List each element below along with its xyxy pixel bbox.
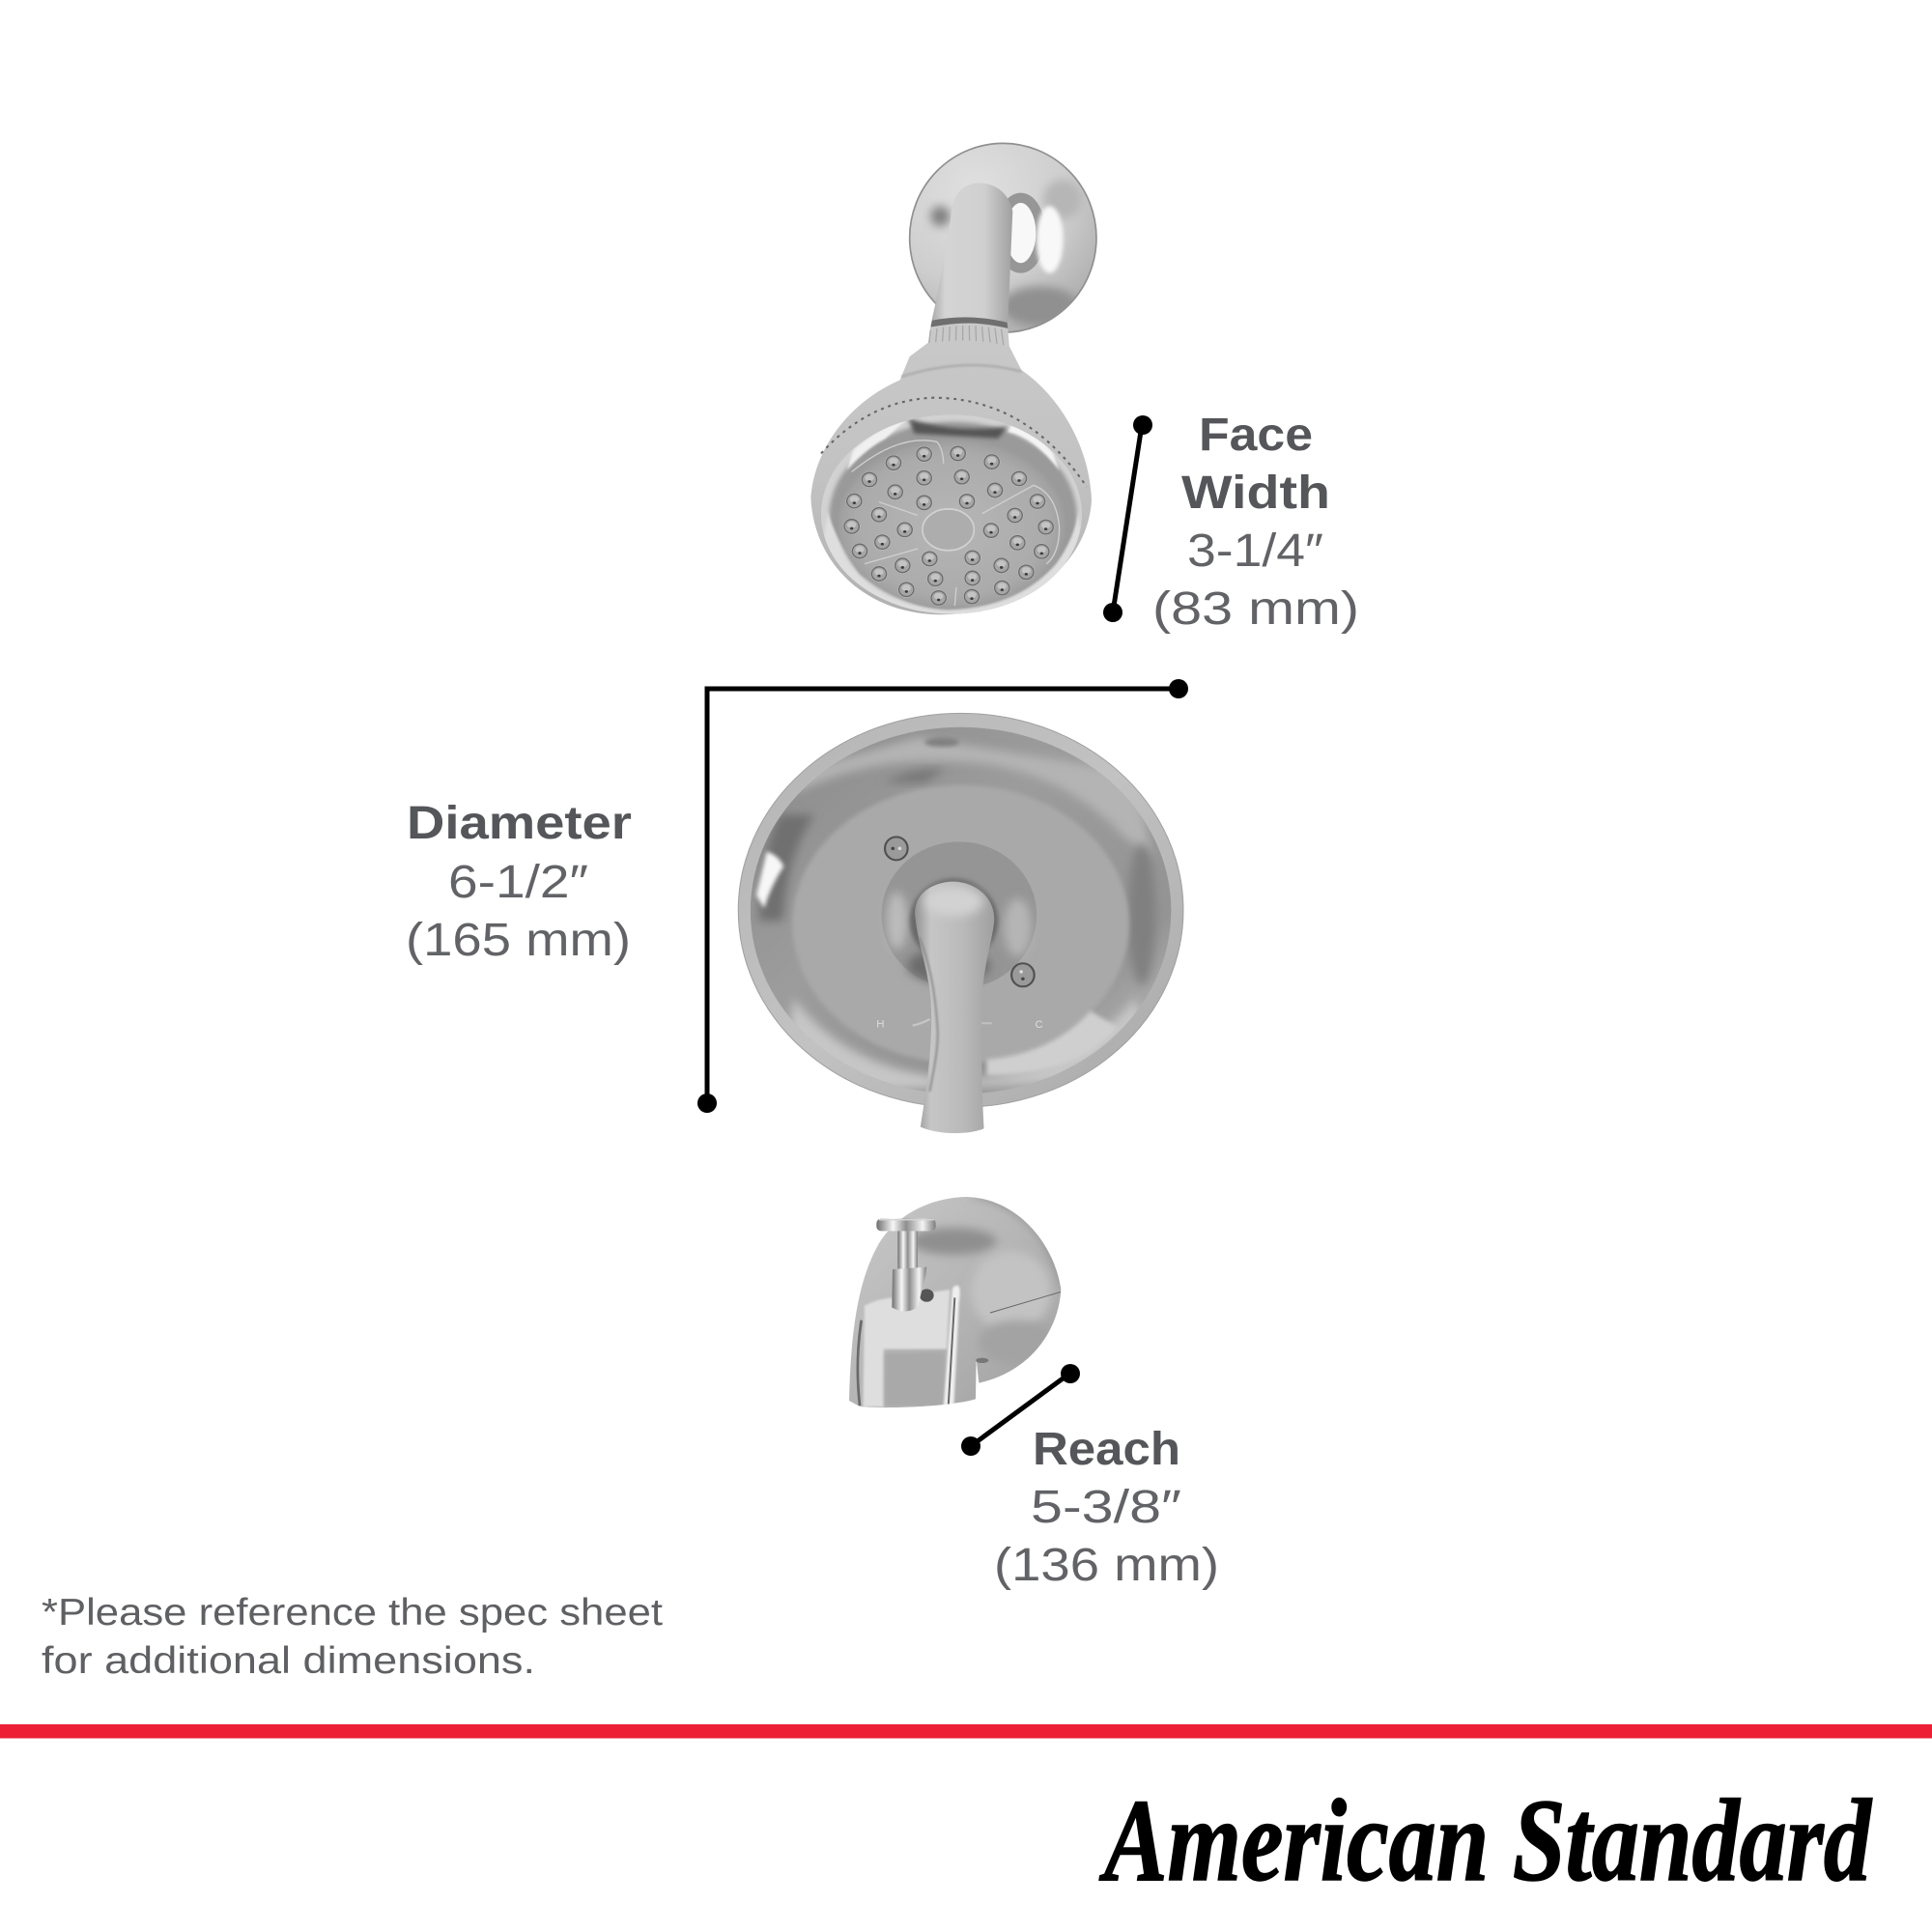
- red divider bar: [0, 1724, 1932, 1739]
- hot and cold markings: C: [1036, 1019, 1043, 1031]
- reach label: Reach: [1033, 1424, 1180, 1475]
- product image: tub spout with diverter: [849, 1188, 1069, 1407]
- head dome: [810, 341, 1092, 614]
- spray holes: [843, 445, 1054, 606]
- reach label: 5-3/8″: [1031, 1482, 1181, 1533]
- face width label: 3-1/4″: [1187, 526, 1323, 577]
- footnote: for additional dimensions.: [42, 1640, 535, 1682]
- hot and cold markings: H: [876, 1019, 885, 1030]
- footnote: [42, 1592, 663, 1682]
- spout body: [849, 1188, 1069, 1407]
- centre plate: [792, 785, 1129, 1064]
- handle escutcheon: [881, 841, 1037, 988]
- face width label: Face: [1199, 410, 1313, 461]
- screw top left: [885, 837, 908, 860]
- footnote: *Please reference the spec sheet: [42, 1592, 663, 1634]
- reach dimension line: [961, 1364, 1080, 1456]
- wall flange: [910, 143, 1096, 332]
- face width label: [1152, 410, 1359, 635]
- diameter label: (165 mm): [406, 915, 631, 966]
- diameter label: 6-1/2″: [448, 857, 588, 908]
- lever handle: [915, 882, 994, 1133]
- diameter dimension bracket: [697, 679, 1188, 1113]
- seam line: [821, 398, 1087, 487]
- chrome bowl: [751, 727, 1171, 1094]
- diverter knob: [876, 1219, 936, 1311]
- knurled collar: [927, 324, 1009, 348]
- face width label: (83 mm): [1152, 583, 1359, 635]
- face plate: [814, 414, 1089, 617]
- outer rim: [738, 713, 1183, 1107]
- face width dimension line: [1103, 415, 1152, 622]
- reach label: (136 mm): [994, 1540, 1219, 1591]
- face width label: Width: [1181, 468, 1330, 519]
- product image: valve trim plate and lever: [738, 713, 1183, 1133]
- reach label: [994, 1424, 1219, 1591]
- shower arm: [930, 183, 1012, 326]
- diameter label: Diameter: [407, 798, 632, 849]
- hot and cold markings: [876, 1019, 1043, 1031]
- diameter label: [406, 798, 632, 966]
- screw bottom right: [1011, 963, 1035, 986]
- product image: shower head and arm: [810, 143, 1096, 617]
